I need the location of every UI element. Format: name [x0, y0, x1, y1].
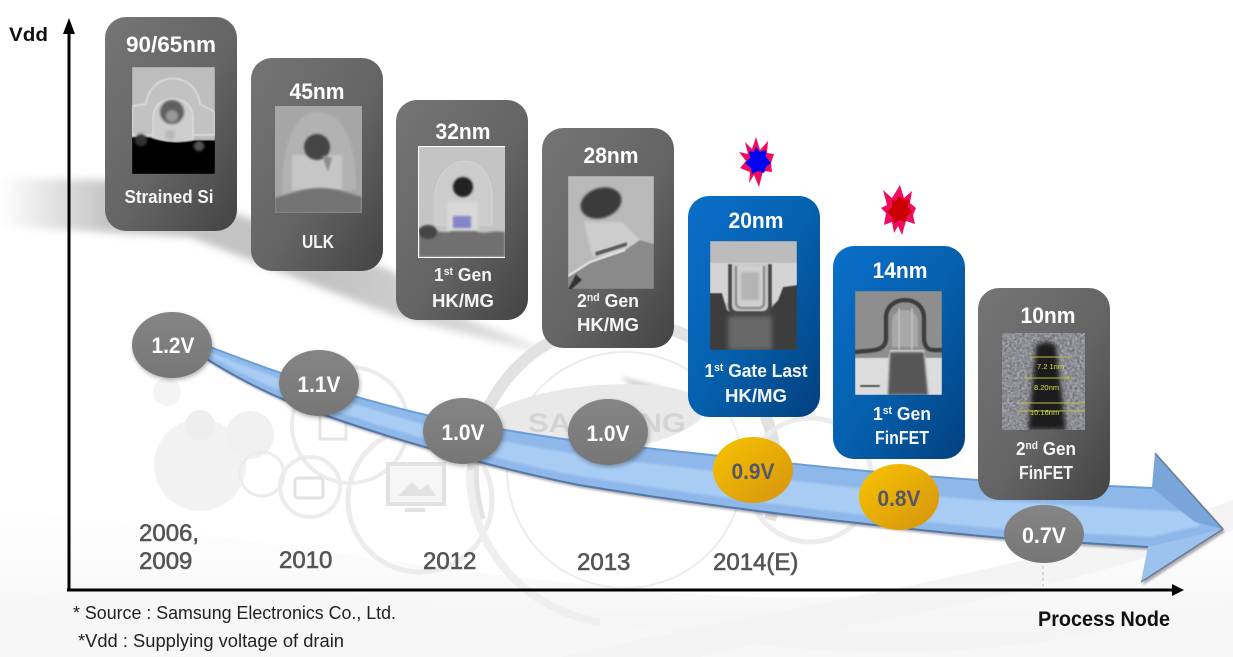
- icon: blue starburst: [739, 137, 774, 187]
- label: 1st Gate Last HK/MG: st: [714, 362, 724, 374]
- voltage marker: 0.7V: 0.7V: [1022, 523, 1066, 548]
- panel: 90/65nm Strained Si: [105, 17, 237, 231]
- voltage marker: 1.0V: 1.0V: [442, 420, 484, 445]
- voltage marker: 1.0V: [423, 398, 503, 464]
- panel: 28nm 2nd Gen HK/MG: [542, 128, 674, 348]
- label: Strained Si: Strained Si: [124, 186, 214, 207]
- micrograph: 10nm FinFET with dimensions: 7.2 1nm: [1037, 362, 1064, 371]
- panel: 28nm 2nd Gen HK/MG: HK/MG: [577, 314, 639, 335]
- voltage marker: 1.2V: 1.2V: [152, 333, 194, 358]
- voltage marker: 0.9V: 0.9V: [732, 459, 774, 484]
- voltage marker: 0.8V: 0.8V: [878, 486, 920, 511]
- voltage marker: 0.7V: [1004, 505, 1084, 563]
- label: 1st Gate Last HK/MG: 1: [704, 360, 715, 381]
- panel: 32nm 1st Gen HK/MG: HK/MG: [432, 290, 494, 311]
- micrograph: 10nm FinFET with dimensions: [1002, 333, 1085, 430]
- year labels: 2012: [423, 548, 476, 575]
- micrograph: 20nm transistor: [710, 241, 797, 350]
- panel: 32nm 1st Gen HK/MG: [396, 100, 528, 320]
- footnotes: *Vdd : Supplying voltage of drain: [78, 631, 344, 651]
- heading: 14nm: 14nm: [872, 258, 928, 283]
- x-axis label: Process Node: Process Node: [1038, 608, 1170, 631]
- micrograph: 90/65nm transistor: [132, 67, 215, 174]
- label: 2nd Gen FinFET: 2: [1016, 438, 1026, 459]
- panel: 20nm 1st Gate Last HK/MG: HK/MG: [725, 385, 787, 406]
- heading: 90/65nm: 90/65nm: [126, 32, 216, 57]
- heading: 10nm: 10nm: [1020, 303, 1076, 328]
- heading: 32nm: 32nm: [436, 119, 490, 144]
- label: 2nd Gen HK/MG: Gen: [600, 290, 639, 311]
- panel: 14nm 1st Gen FinFET: [833, 246, 965, 459]
- micrograph: 10nm FinFET with dimensions: 8.20nm: [1034, 383, 1059, 392]
- label: ULK: ULK: [302, 231, 335, 252]
- panel: 20nm 1st Gate Last HK/MG: [688, 196, 820, 417]
- year labels: 2014(E): [713, 549, 798, 576]
- label: 1st Gen HK/MG: st: [444, 266, 453, 278]
- year labels: 2009: [139, 548, 192, 575]
- voltage marker: 1.1V: [279, 350, 359, 416]
- heading: 20nm: 20nm: [728, 208, 784, 233]
- year labels: [139, 520, 798, 576]
- voltage marker: 0.8V: [859, 464, 939, 530]
- year labels: 2013: [577, 549, 630, 576]
- label: 1st Gen FinFET: Gen: [892, 403, 931, 424]
- footnotes: * Source : Samsung Electronics Co., Ltd.: [73, 603, 396, 623]
- voltage marker: 1.0V: [568, 399, 648, 465]
- axes: [63, 18, 1184, 596]
- label: 2nd Gen HK/MG: nd: [587, 292, 600, 304]
- heading: 28nm: 28nm: [584, 143, 638, 168]
- year labels: 2006,: [139, 520, 199, 547]
- year labels: 2010: [279, 547, 332, 574]
- micrograph: 28nm transistor: [568, 176, 654, 289]
- panel: 10nm 2nd Gen FinFET: [978, 288, 1110, 500]
- panel: 45nm ULK: [251, 58, 383, 271]
- micrograph: 10nm FinFET with dimensions: 10.16nm: [1030, 408, 1059, 417]
- panel: 10nm 2nd Gen FinFET: FinFET: [1019, 462, 1074, 483]
- trend arrow: voltage scaling: [205, 345, 1225, 585]
- voltage marker: 1.1V: 1.1V: [298, 372, 340, 397]
- y-axis label: Vdd: Vdd: [9, 25, 48, 46]
- label: 1st Gate Last HK/MG: Gate Last: [723, 360, 808, 381]
- micrograph: 45nm transistor: [275, 106, 362, 213]
- voltage marker: 1.2V: [132, 312, 212, 378]
- micrograph: 14nm FinFET: [855, 291, 942, 395]
- voltage marker: 0.9V: [713, 437, 793, 503]
- background: white page with grey waves, circles and logo: SAMSUNG: [528, 408, 686, 438]
- footnotes: [73, 603, 396, 651]
- label: 1st Gen FinFET: 1: [873, 403, 883, 424]
- label: 2nd Gen FinFET: Gen: [1038, 438, 1076, 459]
- icon: red starburst: [881, 185, 916, 235]
- label: 1st Gen HK/MG: 1: [434, 264, 444, 285]
- label: 2nd Gen FinFET: nd: [1026, 440, 1038, 452]
- label: 1st Gen HK/MG: Gen: [453, 264, 492, 285]
- panel: 14nm 1st Gen FinFET: FinFET: [875, 427, 930, 448]
- heading: 45nm: 45nm: [290, 79, 344, 104]
- label: 1st Gen FinFET: st: [883, 405, 892, 417]
- micrograph: 32nm transistor: [418, 146, 505, 258]
- voltage marker: 1.0V: 1.0V: [586, 421, 630, 446]
- label: 2nd Gen HK/MG: 2: [577, 290, 587, 311]
